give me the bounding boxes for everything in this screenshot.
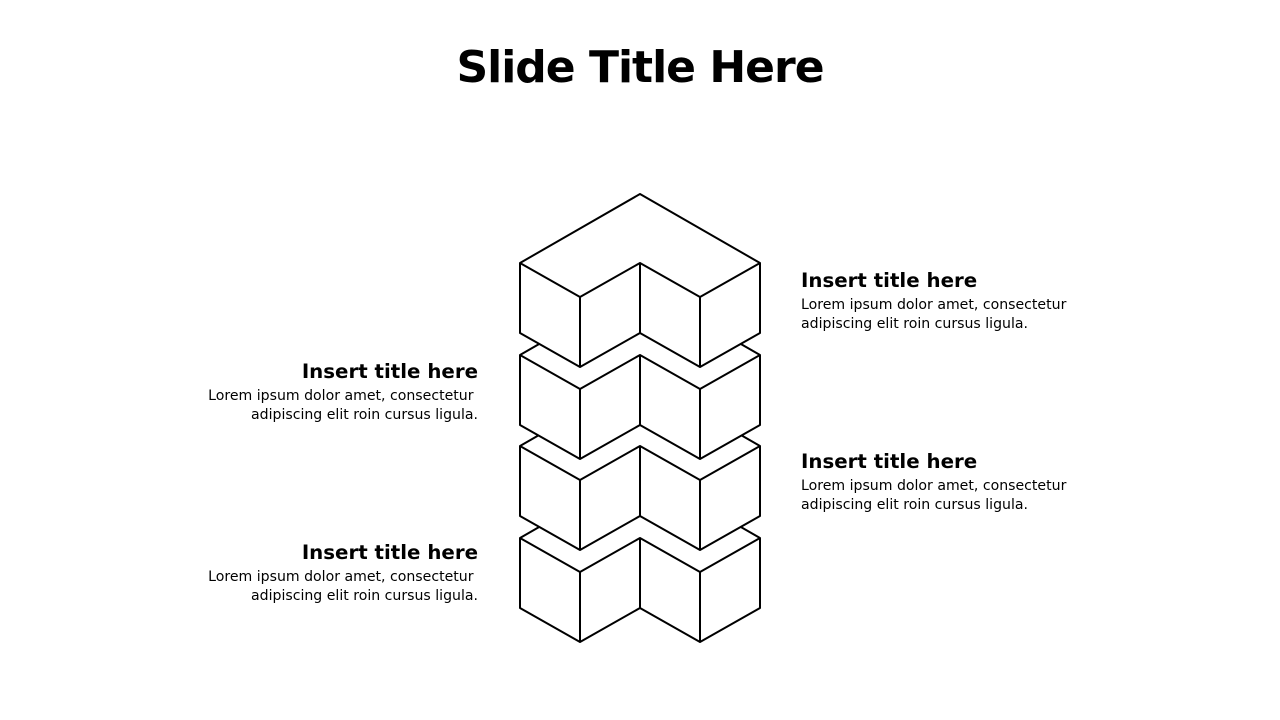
text block: right 2 (801, 450, 1066, 513)
text block: left 1: adipiscing elit roin cursus ligula. (251, 407, 478, 423)
block layer 4 (520, 469, 760, 642)
text block: right 1: Insert title here (801, 269, 977, 292)
text block: left 2: Lorem ipsum dolor amet, consectetur (208, 569, 474, 585)
title: Slide Title Here (456, 42, 824, 93)
text block: right 2: adipiscing elit roin cursus ligula. (801, 497, 1028, 513)
block layer 3 (520, 377, 760, 550)
text block: left 2: adipiscing elit roin cursus ligula. (251, 588, 478, 604)
text block: right 1: Lorem ipsum dolor amet, consectetur (801, 297, 1066, 313)
text block: right 1 (801, 269, 1066, 332)
text block: left 1 (208, 360, 478, 423)
block layer 1 (520, 194, 760, 367)
text block: left 2 (208, 541, 478, 604)
text block: left 1: Insert title here (302, 360, 478, 383)
text block: left 2: Insert title here (302, 541, 478, 564)
text block: right 1: adipiscing elit roin cursus ligula. (801, 316, 1028, 332)
text block: left 1: Lorem ipsum dolor amet, consectetur (208, 388, 474, 404)
text block: right 2: Lorem ipsum dolor amet, consectetur (801, 478, 1066, 494)
text block: right 2: Insert title here (801, 450, 977, 473)
block layer 2 (520, 286, 760, 459)
